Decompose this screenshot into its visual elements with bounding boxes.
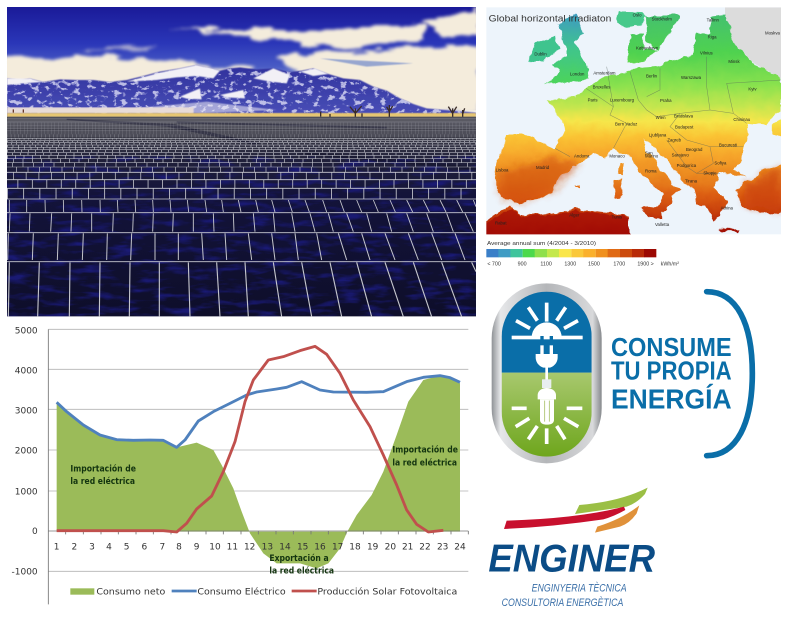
x axis labels: 3 (89, 543, 95, 553)
map legend: 900 (518, 261, 527, 267)
annotation: export (269, 553, 334, 576)
city labels (495, 13, 781, 227)
x axis labels: 19 (367, 543, 379, 553)
snow caps (7, 65, 328, 113)
city labels: Valletta (655, 222, 670, 227)
annotation: export: la red eléctrica (269, 565, 334, 576)
swoosh: green (575, 488, 648, 514)
map: Global horizontal irradiation of Europe (483, 7, 787, 267)
city labels: Tirana (685, 178, 698, 183)
logo wordmark (611, 332, 732, 414)
city labels: Praha (660, 98, 672, 103)
x axis labels: 2 (71, 543, 77, 553)
x axis labels: 21 (402, 543, 413, 553)
x axis labels: 24 (454, 543, 466, 553)
Enginer wordmark: ENGINER (488, 537, 656, 581)
mountain snow texture (7, 65, 476, 117)
panel colour patches (7, 157, 476, 317)
x axis labels: 7 (159, 543, 165, 553)
x axis labels: 14 (279, 543, 291, 553)
warmer patches (500, 157, 580, 202)
city labels: Athina (721, 206, 734, 211)
city labels: Bern Vaduz (615, 122, 637, 127)
city labels: Bruxelles (593, 84, 610, 89)
x axis labels: 18 (349, 543, 361, 553)
city labels: Wien (656, 115, 666, 120)
x axis labels: 4 (106, 543, 112, 553)
pale plain (7, 107, 194, 113)
city labels: Alger (569, 212, 580, 217)
city labels: Moskva (765, 30, 781, 35)
x axis labels: 15 (297, 543, 308, 553)
grey area outside data (725, 7, 781, 78)
city labels: Sarajevo (672, 152, 689, 157)
city labels: Marino (645, 154, 659, 159)
city labels: Monaco (609, 154, 625, 159)
city labels: Budapest (675, 124, 694, 129)
x axis labels: 1 (54, 543, 60, 553)
map legend: 1100 (540, 261, 552, 267)
city labels: Dublin (534, 52, 547, 57)
logo wordmark: TU PROPIA (611, 356, 732, 386)
x axis labels: 12 (244, 543, 255, 553)
y axis labels (12, 326, 38, 577)
chart legend (70, 586, 457, 597)
map legend: Average annual sum (4/2004 - 3/2010) (487, 241, 596, 247)
annotation: left import: Importación de (70, 464, 136, 475)
y axis labels: 3000 (15, 407, 38, 417)
swoosh: orange (595, 505, 639, 533)
grid lines (48, 329, 468, 571)
logo: Consume tu propia energía (492, 283, 752, 463)
logo wordmark: ENERGÍA (611, 383, 732, 414)
clouds (3, 10, 480, 112)
city labels: Amsterdam (593, 70, 616, 75)
electric consumption line (57, 376, 460, 447)
trees (12, 105, 466, 117)
annotation: export: Exportación a (269, 553, 329, 564)
y axis labels: -1000 (12, 567, 38, 577)
annotation: left import (70, 464, 136, 487)
x axis labels: 11 (227, 543, 238, 553)
near panel columns (8, 262, 476, 317)
map legend: kWh/m² (661, 261, 679, 267)
silver badge frame (492, 283, 602, 463)
solar production line (57, 346, 443, 532)
map legend: 1300 (564, 261, 576, 267)
city labels: Chisinau (733, 117, 751, 122)
y axis labels: 1000 (15, 487, 38, 497)
chart legend: Consumo neto (96, 587, 165, 597)
city labels: Rabat (495, 220, 507, 225)
city labels: Podgorica (677, 163, 697, 168)
city labels: Stockholm (652, 17, 672, 22)
city labels: Riga (708, 35, 717, 40)
annotation: left import: la red eléctrica (70, 476, 135, 487)
bracket arc (707, 292, 752, 456)
y axis labels: 4000 (15, 367, 38, 377)
city labels: Minsk (728, 59, 740, 64)
city labels: Luxembourg (610, 98, 635, 103)
x axis labels: 16 (314, 543, 326, 553)
x axis labels: 9 (194, 543, 200, 553)
tagline: CONSULTORIA ENERGÈTICA (502, 596, 623, 609)
country borders (555, 57, 781, 173)
x axis labels: 17 (332, 543, 343, 553)
mountain range (7, 65, 476, 117)
city labels: Paris (588, 98, 598, 103)
y axis labels: 0 (32, 527, 38, 537)
map legend: 1700 (613, 261, 625, 267)
swoosh: red (504, 507, 625, 529)
city labels: Zagreb (667, 138, 682, 143)
city labels: Ljubljana (649, 132, 667, 137)
city labels: Vilnius (700, 51, 713, 56)
city labels: San (645, 150, 653, 155)
city labels: Tunis (612, 215, 622, 220)
map title: Global horizontal irradiaton (489, 14, 611, 24)
logo: Enginer (488, 488, 656, 609)
city labels: Sofiya (714, 160, 727, 165)
x axis labels: 13 (262, 543, 273, 553)
city labels: Tallinn (707, 18, 720, 23)
distant dark rows (67, 119, 476, 170)
city labels: Bratislava (674, 114, 694, 119)
city labels: Madrid (536, 165, 550, 170)
city labels: Lisboa (496, 168, 509, 173)
city labels: Skopje (703, 170, 717, 175)
map legend: < 700 (487, 261, 501, 267)
y axis labels: 2000 (15, 447, 38, 457)
tagline: ENGINYERIA TÈCNICA (532, 582, 627, 595)
sky (7, 7, 476, 110)
city labels: København (636, 45, 659, 50)
chart legend: Consumo Eléctrico (197, 586, 286, 597)
badge inner sky and field (502, 292, 592, 457)
y axis labels: 5000 (15, 326, 38, 336)
chart: daily consumption and solar production (12, 326, 468, 604)
solar panel field (7, 117, 476, 317)
map legend: 1900 > (637, 261, 654, 267)
blue streak in clouds (320, 58, 413, 67)
city labels: Roma (645, 169, 657, 174)
photo: solar panel field with snowy mountains (3, 7, 480, 317)
map sea background (486, 7, 781, 234)
x axis labels: 22 (419, 543, 431, 553)
land masses coloured by irradiation (483, 12, 787, 238)
city labels: Andorra (574, 154, 590, 159)
x axis labels: 5 (124, 543, 130, 553)
far panel columns (7, 128, 476, 194)
row lines (7, 172, 476, 317)
city labels: Warszawa (681, 75, 702, 80)
icon: sun with plug and bulb (512, 303, 583, 444)
x axis labels: 8 (176, 543, 182, 553)
city labels: Oslo (633, 13, 642, 18)
city labels: Bucuresti (719, 142, 737, 147)
city labels: Kyiv (748, 86, 757, 91)
Britain, Ireland and Norway (547, 13, 590, 83)
annotation: right import: la red eléctrica (392, 457, 457, 468)
chart legend: Producción Solar Fotovoltaica (317, 586, 457, 597)
city labels: London (570, 72, 585, 77)
x axis labels (54, 543, 466, 553)
x axis labels: 20 (385, 543, 396, 553)
x axis labels: 23 (437, 543, 448, 553)
map legend: 1500 (588, 261, 600, 267)
logo wordmark: CONSUME (611, 332, 732, 362)
net consumption area (57, 376, 460, 568)
x axis labels: 6 (141, 543, 147, 553)
golden horizon (7, 113, 476, 117)
x axis labels: 10 (209, 543, 221, 553)
annotation: right import (392, 445, 458, 468)
tagline (502, 582, 627, 609)
city labels: Berlin (646, 74, 658, 79)
annotation: right import: Importación de (392, 445, 458, 456)
map legend (486, 241, 679, 267)
axes (48, 329, 468, 604)
city labels: Beograd (686, 147, 703, 152)
